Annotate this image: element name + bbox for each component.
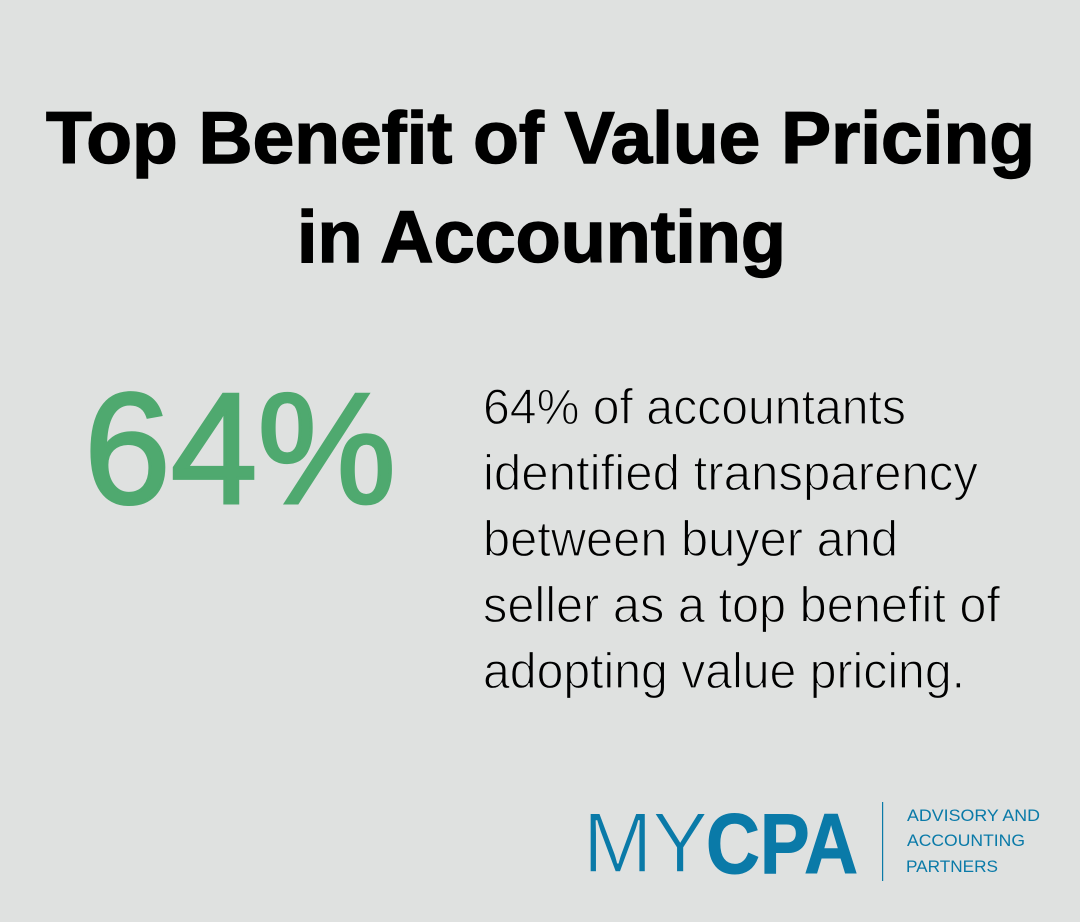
description text: identified transparency [483, 445, 978, 501]
logo tagline: ADVISORY AND [907, 806, 1040, 825]
logo: MYCPA [583, 796, 1040, 892]
logo tagline [906, 806, 1040, 876]
logo wordmark: MY [583, 796, 708, 891]
description text: 64% of accountants [483, 379, 906, 435]
big statistic: 64%: 64% [84, 361, 396, 537]
title: Top Benefit of Value Pricing [46, 98, 1035, 179]
logo tagline: ACCOUNTING [907, 831, 1025, 850]
logo divider [882, 802, 883, 881]
logo wordmark: CPA [706, 797, 858, 892]
title: in Accounting [297, 197, 786, 278]
logo tagline: PARTNERS [906, 857, 998, 876]
logo wordmark [583, 796, 858, 892]
description text: between buyer and [483, 511, 898, 567]
description text: adopting value pricing. [483, 643, 965, 699]
description text [483, 379, 1000, 699]
title [46, 98, 1035, 278]
description text: seller as a top benefit of [483, 577, 1000, 633]
